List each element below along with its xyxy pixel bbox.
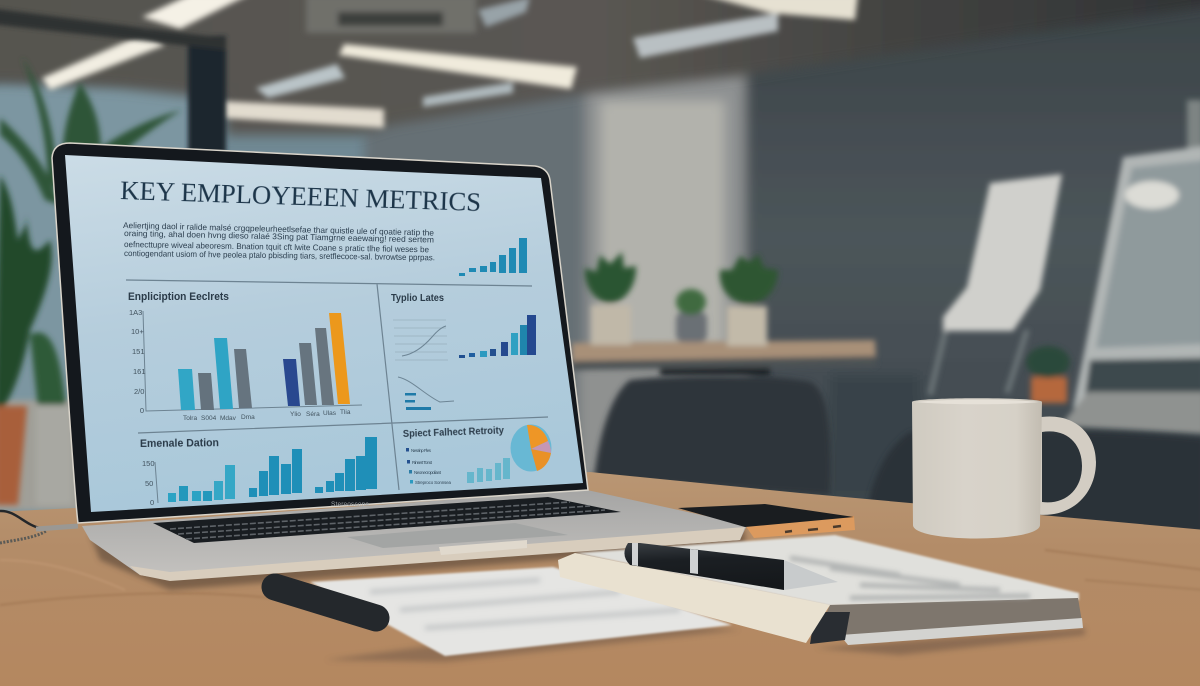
column and beam [0,8,226,161]
legend: Rinsert Tonst [412,460,433,465]
blurred office background [0,0,1200,540]
cable on desk [0,511,78,543]
bottom bar chart: 50 [145,479,153,488]
main bar chart: 10+ [131,327,144,336]
main bar chart: 161 [133,367,146,376]
main bar chart: Séra [306,411,320,418]
intro paragraph: contiogendant usiom of hve peolea ptalo pbisding tiars, sretflecoce-sal. bvrowtse pprpas. [124,248,435,262]
legend: Streproco Sonnsea [415,480,451,485]
screen title: KEY EMPLOYEEEN METRICS [120,176,482,217]
intro paragraph [123,220,435,262]
easel and whiteboard [930,100,1200,434]
main bar chart: Ulas [323,410,337,417]
main bar chart: 151 [132,347,145,356]
laptop [52,143,747,590]
main bar chart: 1A3 [129,308,142,317]
bottom bar chart: 0 [150,498,154,507]
small teal bars [467,458,510,483]
main bar chart: Mdav [220,415,237,422]
loose paper document [310,567,740,662]
main bar chart: 2/0 [134,387,144,396]
laptop base [82,490,747,590]
ceiling with light panels [0,0,1200,135]
intro paragraph: Aeliertjing daol ir ralide malsé crgqpeleurheetlsefae thar quistle ule of qoatie ratip the [123,220,434,238]
hinge logo: Stereoscope [331,501,369,508]
front notch [439,540,527,555]
wooden desk [0,472,1200,686]
office chairs [594,376,1200,535]
main bar chart: Tlia [340,409,351,416]
dashboard on screen [120,176,551,507]
phone on desk [678,504,855,538]
legend: Nesrinp Fles [411,448,432,453]
main bar chart: S004 [201,415,217,422]
screen bezel [52,143,588,523]
bottom bar chart: 150 [142,459,155,468]
pen on notebook [624,543,838,590]
main bar chart [129,308,362,422]
screen [65,155,583,512]
keyboard [153,497,621,543]
black marker [275,587,376,618]
intro paragraph: oraing ting, ahal doen hvng dieso ralaé 3Sing pat Tiamgrne eaewaing! reed sertem [124,228,434,244]
line charts and mini bars [393,315,536,410]
main bar chart: Ylio [290,411,301,418]
ceiling vent [306,0,476,33]
top mini bar chart [459,238,527,276]
legend: Neonecropoliant [414,470,442,475]
camera notch [288,155,345,169]
left plants and pots [0,57,182,505]
dividers [126,280,548,490]
legend [406,448,451,485]
chart heading: left: Enpliciption Eeclrets [128,291,229,303]
main bar chart: 0 [140,406,144,415]
chart heading: right: Typlio Lates [391,292,444,304]
coffee mug [912,398,1096,538]
main bar chart: Tolra [183,415,197,422]
pie chart [510,424,552,472]
bottom bar chart [142,437,377,507]
chart heading: bottom right: Spiect Falhect Retroity [403,424,504,440]
main bar chart: Dma [241,414,255,421]
mug handle [1033,416,1096,515]
back table with potted plants [572,252,876,376]
trackpad [347,523,568,548]
intro paragraph: oefnecttupre wiveal abeoresm. Bnation tquit cft lwite Coane s pratic tlhe fiol weses be [124,239,429,254]
chart heading: bottom left: Emenale Dation [140,437,219,450]
notebook with pages [558,535,1085,655]
